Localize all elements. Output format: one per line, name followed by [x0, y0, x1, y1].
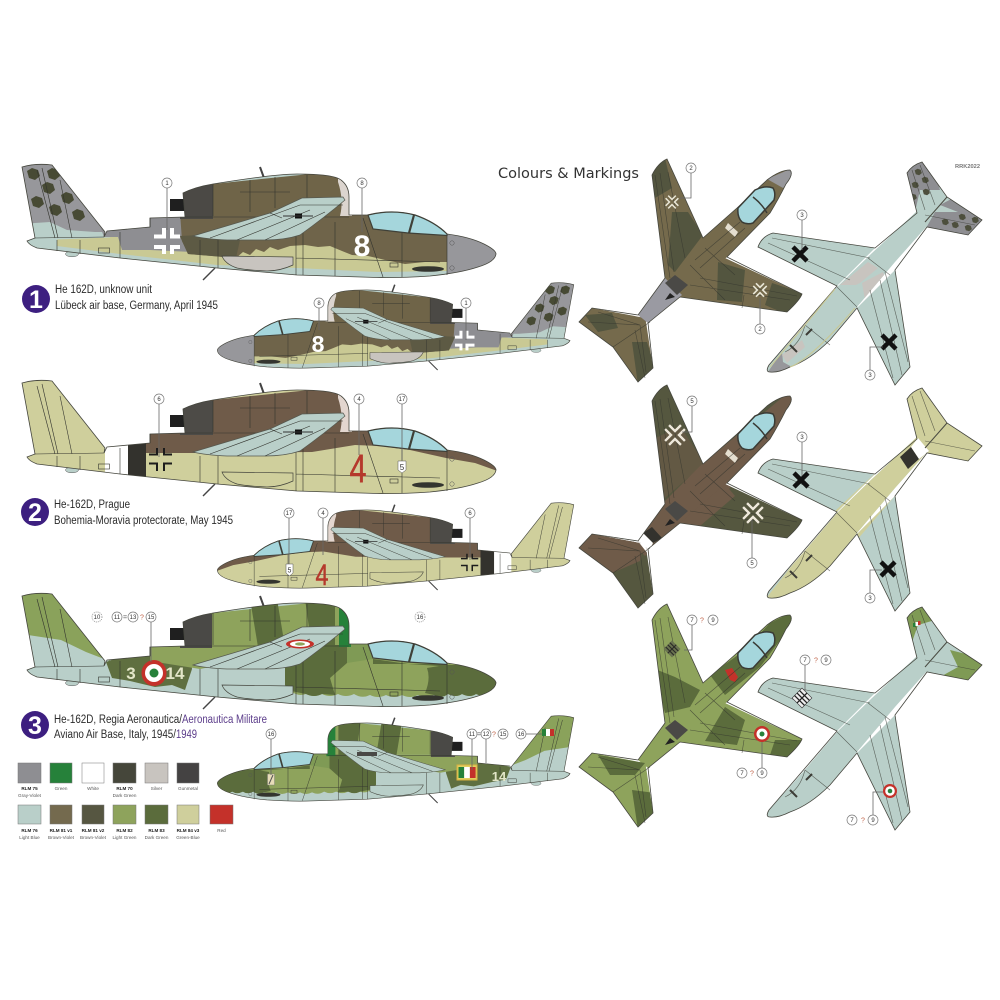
aircraft 1: caption: 1	[29, 286, 43, 314]
aircraft 3: caption	[21, 711, 267, 741]
black crosses	[793, 247, 896, 349]
aircraft 2: caption: He-162D, Prague	[54, 499, 130, 511]
roundel on fuselage	[142, 660, 166, 686]
colour swatches: RLM 76	[21, 828, 38, 833]
callouts small	[266, 729, 542, 775]
aircraft 3: caption: 3	[28, 712, 42, 740]
code 3 and 14: 3	[126, 664, 136, 683]
callouts small: 8	[317, 301, 321, 307]
shield 5: 5	[400, 463, 405, 472]
colour swatches: RLM 75	[21, 786, 38, 791]
callouts: 5	[690, 399, 694, 405]
wing mark	[357, 752, 377, 756]
aircraft 1: small side view	[213, 279, 575, 370]
title: Colours & Markings	[498, 166, 639, 182]
colour swatches: Light Green	[112, 835, 137, 840]
number 8: 8	[354, 230, 370, 263]
aircraft 1: large side view	[20, 160, 502, 280]
callouts: 7	[690, 618, 694, 624]
fuselage edge trim	[770, 289, 855, 367]
callouts: 1	[165, 181, 169, 187]
callouts: 16	[417, 615, 424, 621]
aircraft 3: caption: He-162D, Regia Aeronautica/	[54, 714, 183, 726]
callouts small: 1	[464, 301, 468, 307]
aircraft 2: small side view	[214, 499, 575, 592]
colour swatches: Dark Green	[113, 793, 137, 798]
hatched wing mark	[792, 688, 812, 708]
callouts: 11	[114, 615, 121, 621]
callouts small	[284, 508, 475, 564]
colour swatches: Brown-Violet	[80, 835, 107, 840]
shield 5 small: 5	[288, 568, 292, 574]
callouts small: 17	[286, 511, 293, 517]
callouts: ?	[861, 818, 865, 824]
callouts	[680, 163, 765, 334]
callouts small: =	[477, 732, 481, 738]
callouts: 17	[399, 397, 406, 403]
colour swatches: RLM 82	[116, 828, 133, 833]
callouts	[162, 178, 367, 232]
tricolour on fuselage	[457, 765, 477, 780]
callouts: 9	[711, 618, 715, 624]
aircraft 3: caption: Aviano Air Base, Italy, 1945/	[54, 729, 177, 741]
callouts: 7	[803, 658, 807, 664]
colour swatches: Brown-Violet	[48, 835, 75, 840]
colour swatches: Light Blue	[19, 835, 40, 840]
callouts	[684, 615, 767, 778]
callouts: ?	[140, 614, 144, 622]
aircraft 2: lower surface view	[758, 388, 982, 612]
callouts: 8	[360, 181, 364, 187]
hatched wing mark	[664, 641, 680, 657]
callouts: 15	[148, 615, 155, 621]
callouts	[92, 612, 425, 662]
shield 5	[398, 461, 406, 473]
tail flag	[913, 621, 920, 627]
aircraft 3: lower surface view	[758, 606, 982, 831]
aircraft 1: lower surface view	[758, 162, 982, 386]
callouts: 10	[94, 615, 101, 621]
callouts: ?	[814, 658, 818, 664]
code 3 and 14	[126, 664, 185, 683]
code 3 and 14: 14	[166, 664, 185, 683]
red number 4: 4	[350, 447, 366, 491]
black crosses	[794, 473, 895, 576]
aircraft 2: caption: Bohemia-Moravia protectorate, May 1945	[54, 515, 233, 527]
aircraft 2: caption	[21, 498, 233, 527]
callouts: 3	[800, 213, 804, 219]
aircraft 3: caption: 1949	[176, 729, 197, 741]
callouts small: 15	[500, 732, 507, 738]
callouts small: 16	[268, 732, 275, 738]
callouts: 3	[868, 596, 872, 602]
callouts: 13	[130, 615, 137, 621]
callouts small: 16	[518, 732, 525, 738]
aircraft 3: small side view	[214, 712, 575, 803]
callouts: 7	[850, 818, 854, 824]
callouts small: ?	[492, 732, 496, 738]
wing crosses	[659, 419, 769, 529]
callouts: 9	[824, 658, 828, 664]
nose insignia	[268, 774, 274, 785]
callouts small: 11	[469, 732, 476, 738]
callouts	[797, 210, 883, 380]
callouts: 2	[758, 327, 762, 333]
aircraft 1: upper surface view	[578, 158, 802, 383]
callouts: 9	[760, 771, 764, 777]
colour swatches: RLM 81 v1	[50, 828, 73, 833]
colour swatches: RLM 84 v3	[177, 828, 200, 833]
code 14: 14	[492, 769, 507, 784]
wing roundel	[883, 784, 897, 798]
callouts: ?	[700, 618, 704, 624]
red number 4 small: 4	[316, 559, 328, 592]
callouts: 7	[740, 771, 744, 777]
colour swatches: RLM 81 v2	[82, 828, 105, 833]
callouts: 9	[871, 818, 875, 824]
aircraft 1: caption: He 162D, unknow unit	[55, 284, 153, 296]
tricolour on fin	[542, 729, 554, 736]
aircraft 3: large side view	[20, 589, 500, 709]
aircraft 2: caption: 2	[28, 499, 42, 527]
callouts	[800, 655, 883, 825]
colour swatches: Red	[217, 828, 226, 833]
colour swatches: RLM 83	[148, 828, 165, 833]
aircraft 2: large side view	[20, 376, 500, 496]
wing roundel	[754, 726, 770, 742]
callouts: 3	[868, 373, 872, 379]
number 8 small: 8	[312, 331, 325, 357]
colour swatches: Green	[55, 786, 68, 791]
aircraft 3: caption: Aeronautica Militare	[182, 714, 267, 726]
colour swatches	[18, 763, 233, 840]
colour swatches: Gunmetal	[178, 786, 198, 791]
aircraft 3: upper surface view	[578, 604, 802, 828]
colour swatches: Gray-Violet	[18, 793, 42, 798]
callouts: 5	[750, 561, 754, 567]
colour swatches: RLM 70	[116, 786, 133, 791]
callouts: 6	[157, 397, 161, 403]
callouts	[154, 394, 407, 460]
colour swatches: Green-Blue	[176, 835, 200, 840]
callouts small	[314, 298, 471, 340]
aircraft 2: upper surface view	[578, 384, 802, 609]
copyright tag: RRK2022	[955, 164, 980, 170]
callouts	[797, 432, 882, 603]
callouts: 2	[689, 166, 693, 172]
callouts small: 12	[483, 732, 490, 738]
wing roundel	[286, 640, 314, 648]
callouts: =	[123, 614, 127, 622]
colour swatches: Silver	[151, 786, 163, 791]
callouts small: 6	[468, 511, 472, 517]
callouts: 4	[357, 397, 361, 403]
shield 5 small	[286, 564, 293, 576]
wing crosses	[662, 192, 771, 301]
aircraft 1: caption	[22, 284, 218, 314]
aircraft 1: caption: Lübeck air base, Germany, April 1945	[55, 300, 218, 312]
colour swatches: Dark Green	[145, 835, 169, 840]
callouts: ?	[750, 770, 754, 778]
callouts	[682, 396, 757, 568]
callouts: 3	[800, 435, 804, 441]
colour swatches: White	[87, 786, 99, 791]
callouts small: 4	[321, 511, 325, 517]
